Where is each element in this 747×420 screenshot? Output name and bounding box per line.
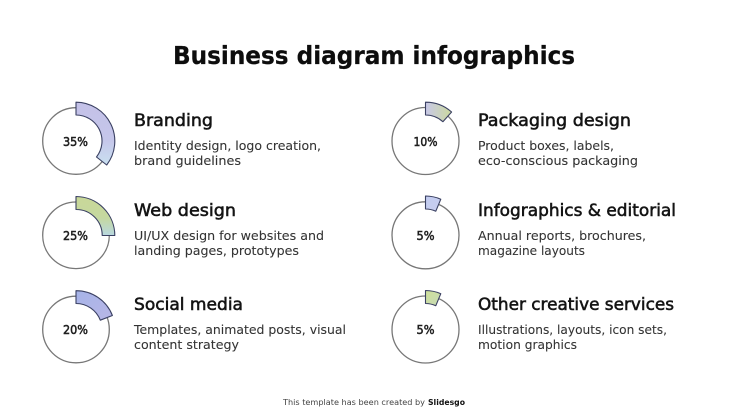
panel: web design [43,196,324,269]
text: other creative services description: Illustrations, layouts, icon sets, [478,322,667,337]
heading: social media: Social media [134,295,243,314]
donut chart: infographics and editorial 5% [392,196,459,269]
panel: other creative services [392,290,674,363]
text: web design description: UI/UX design for websites and [134,228,324,243]
donut chart: branding 35% [43,102,115,174]
heading: infographics and editorial: Infographics & editorial [478,201,676,220]
text: infographics and editorial description: Annual reports, brochures, [478,228,646,243]
text: infographics and editorial description: magazine layouts [478,243,585,258]
panel: packaging design [392,102,638,174]
text: packaging design description [478,138,638,168]
donut chart: other creative services 5%: 5% [416,322,435,337]
text: infographics and editorial description [478,228,646,258]
heading: packaging design: Packaging design [478,111,631,130]
donut chart: packaging design 10%: 10% [414,134,438,149]
text: other creative services description: motion graphics [478,337,577,352]
text: branding description [134,138,321,168]
text: packaging design description: eco-conscious packaging [478,153,638,168]
panel: branding [43,102,321,174]
title: Business diagram infographics [173,41,575,70]
heading: other creative services: Other creative services [478,295,674,314]
heading: web design: Web design [134,201,236,220]
donut chart: branding 35%: 35% [63,134,88,149]
heading: branding: Branding [134,111,213,130]
text: social media description [133,322,346,352]
panel: social media [43,291,346,363]
footer credit: Slidesgo [428,398,465,407]
donut chart: infographics and editorial 5%: 5% [416,228,435,243]
text: social media description: Templates, animated posts, visual [133,322,346,337]
text: web design description [134,228,324,258]
text: web design description: landing pages, prototypes [134,243,299,258]
donut chart: other creative services 5% [392,290,459,363]
donut chart: web design 25%: 25% [63,228,88,243]
donut chart: social media 20% [43,291,112,363]
text: other creative services description [478,322,667,352]
text: social media description: content strategy [134,337,240,352]
footer credit: This template has been created by [282,398,425,407]
donut chart: web design 25% [43,196,115,269]
text: packaging design description: Product boxes, labels, [478,138,614,153]
donut chart: packaging design 10% [392,102,459,174]
text: branding description: brand guidelines [134,153,241,168]
panel: infographics and editorial [392,196,676,269]
donut chart: social media 20%: 20% [63,322,88,337]
text: branding description: Identity design, logo creation, [134,138,321,153]
